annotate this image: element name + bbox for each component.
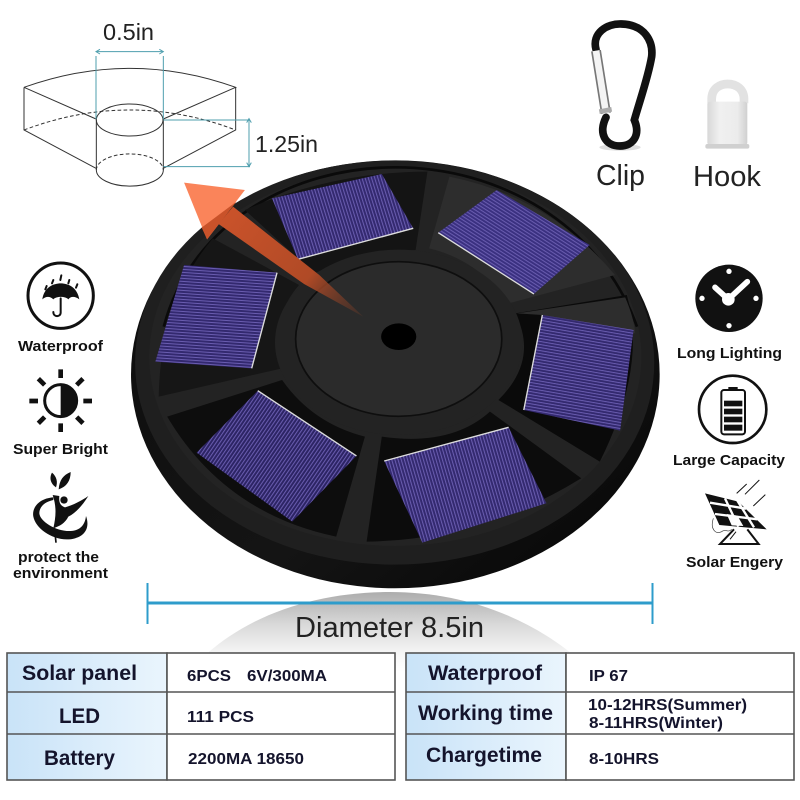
row: battery [44, 746, 304, 770]
hub top [296, 262, 502, 416]
label: Super Bright [13, 441, 108, 458]
row: working time: 8-11HRS(Winter) [589, 715, 723, 732]
label: Waterproof [18, 338, 104, 355]
well: left [159, 238, 299, 397]
label: 0.5in: 0.5in [103, 19, 154, 45]
table cells [7, 653, 395, 780]
icon: clock [695, 265, 763, 332]
label: Clip: Clip [596, 160, 645, 192]
well: top right [429, 177, 615, 303]
row: battery: 2200MA 18650 [188, 751, 304, 768]
icon: eco figure [33, 472, 88, 543]
label: Large Capacity [673, 452, 786, 469]
feature: long lighting [677, 265, 782, 362]
cylinder [96, 104, 163, 186]
label: Solar Engery [686, 554, 784, 571]
rim groove, upper arc [164, 167, 637, 327]
reflection dome under lamp [200, 592, 585, 672]
solar panel bottom [384, 427, 546, 543]
icon: white hook [705, 84, 749, 149]
feature: large capacity [673, 376, 786, 469]
feature: protect the environment [13, 472, 108, 582]
centre hole [381, 323, 416, 350]
hub ring [275, 250, 522, 435]
dimension diagram: pole hole [24, 49, 251, 186]
well: right upper highlight [517, 297, 635, 333]
feature: waterproof [18, 263, 104, 355]
label: protect the [18, 549, 99, 566]
spec table: right [406, 653, 794, 780]
well: top [245, 172, 427, 273]
solar panel top [272, 174, 413, 259]
row: working time [418, 697, 747, 732]
solar panel right [524, 315, 634, 431]
solar panel bottom left [197, 391, 356, 522]
row: LED [59, 704, 254, 728]
row: chargetime: 8-10HRS [589, 751, 659, 768]
row: chargetime: Chargetime [426, 743, 542, 767]
wedge outline [24, 68, 236, 168]
disc body [131, 160, 660, 588]
icon: solar panel [705, 480, 767, 544]
diameter dimension line [147, 583, 653, 624]
icon: umbrella [28, 263, 93, 328]
label: environment [13, 565, 108, 582]
feature: super bright [13, 369, 108, 458]
label: 1.25in: 1.25in [255, 131, 318, 157]
well: bottom left [167, 380, 365, 537]
icon: battery [699, 376, 766, 443]
solar lamp disc [131, 160, 660, 588]
teal dimension lines [96, 49, 251, 167]
row: waterproof: Waterproof [428, 661, 543, 685]
solar panel left [155, 265, 277, 368]
feature: solar energy [686, 480, 784, 571]
well: bottom [367, 412, 581, 542]
row: solar panel: Solar panel [22, 661, 137, 685]
row: battery: Battery [44, 746, 115, 770]
spec table: left [7, 653, 395, 780]
diameter label: Diameter 8.5in [295, 612, 484, 644]
row: LED: LED [59, 704, 100, 728]
table cells [406, 653, 794, 780]
row: waterproof: IP 67 [589, 668, 628, 685]
row: LED: 111 PCS [187, 709, 254, 726]
row: chargetime [426, 743, 659, 768]
row: working time: Working time [418, 701, 553, 725]
arrow pointing to pole hole [184, 183, 363, 317]
rim surface [149, 167, 641, 546]
disc rim [135, 161, 654, 565]
icon: carabiner clip [595, 24, 652, 151]
row: solar panel: 6PCS [187, 668, 231, 685]
row: solar panel: 6V/300MA [247, 668, 327, 685]
label: Long Lighting [677, 345, 782, 362]
solar panel top right [438, 190, 590, 294]
row: waterproof [428, 661, 628, 685]
well: right [498, 295, 633, 462]
row: working time: 10-12HRS(Summer) [588, 697, 747, 714]
icon: half sun [29, 369, 92, 432]
row: solar panel [22, 661, 327, 685]
label: Hook: Hook [693, 161, 761, 193]
